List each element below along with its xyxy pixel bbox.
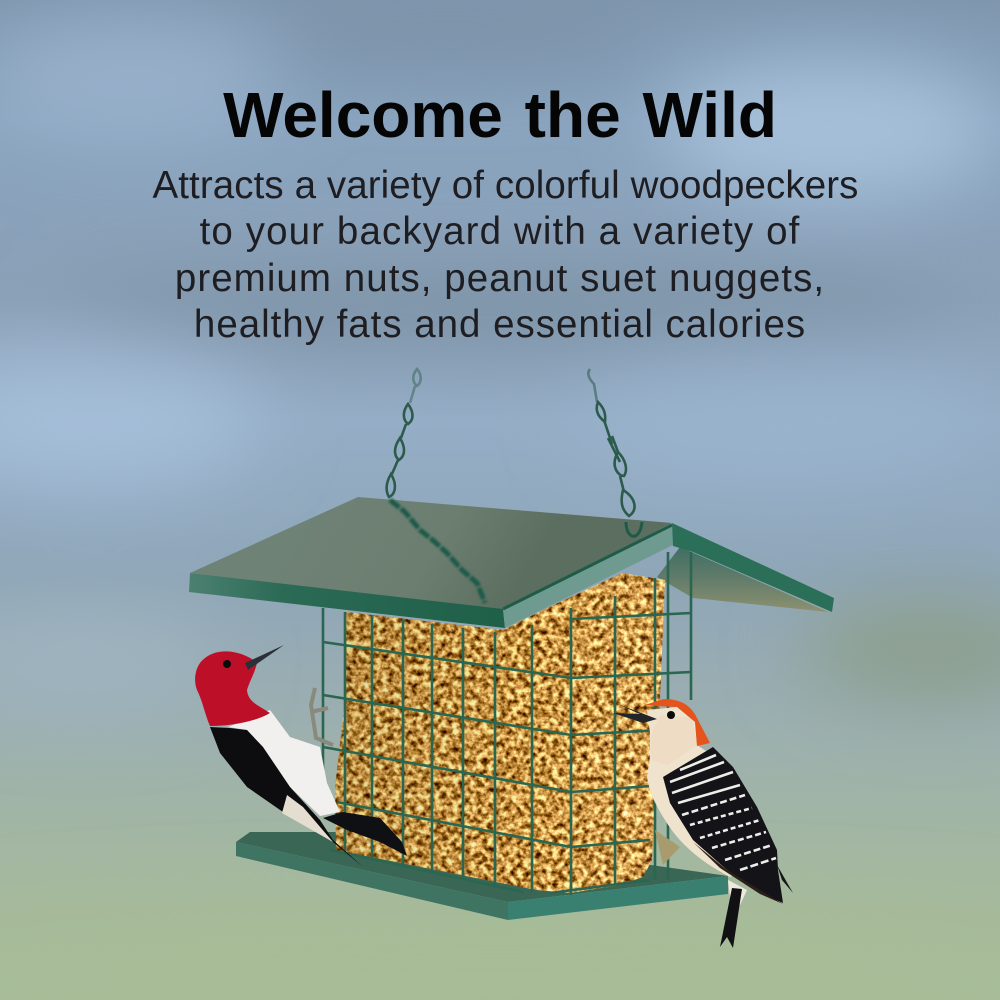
tail — [720, 888, 742, 948]
foot — [311, 688, 333, 745]
orange cap — [645, 699, 710, 746]
feeder tray — [236, 832, 728, 920]
white rump — [728, 880, 747, 905]
white back — [228, 710, 340, 816]
description text — [152, 164, 859, 346]
bird: red-headed woodpecker — [195, 645, 407, 867]
bird: red-bellied woodpecker — [613, 699, 793, 948]
side tail — [777, 865, 793, 893]
black wing — [210, 727, 363, 867]
roof — [189, 497, 834, 628]
lower white patch — [282, 795, 333, 842]
hanging chains — [387, 369, 635, 516]
chain shadow on roof — [390, 500, 485, 603]
wire cage — [323, 552, 691, 895]
description text: premium nuts, peanut suet nuggets, — [175, 257, 825, 300]
description text: to your backyard with a variety of — [200, 210, 800, 253]
far roof underside — [657, 547, 828, 612]
feeder illustration — [189, 367, 834, 948]
description text: Attracts a variety of colorful woodpeckers — [152, 164, 859, 207]
tail — [323, 812, 407, 856]
title: Welcome the Wild — [223, 79, 777, 151]
barred wing — [663, 747, 783, 903]
suet seed block — [330, 570, 670, 900]
beak — [613, 703, 657, 723]
body — [647, 707, 745, 877]
red head — [195, 651, 270, 726]
description text: healthy fats and essential calories — [194, 303, 806, 346]
foot — [655, 830, 680, 865]
